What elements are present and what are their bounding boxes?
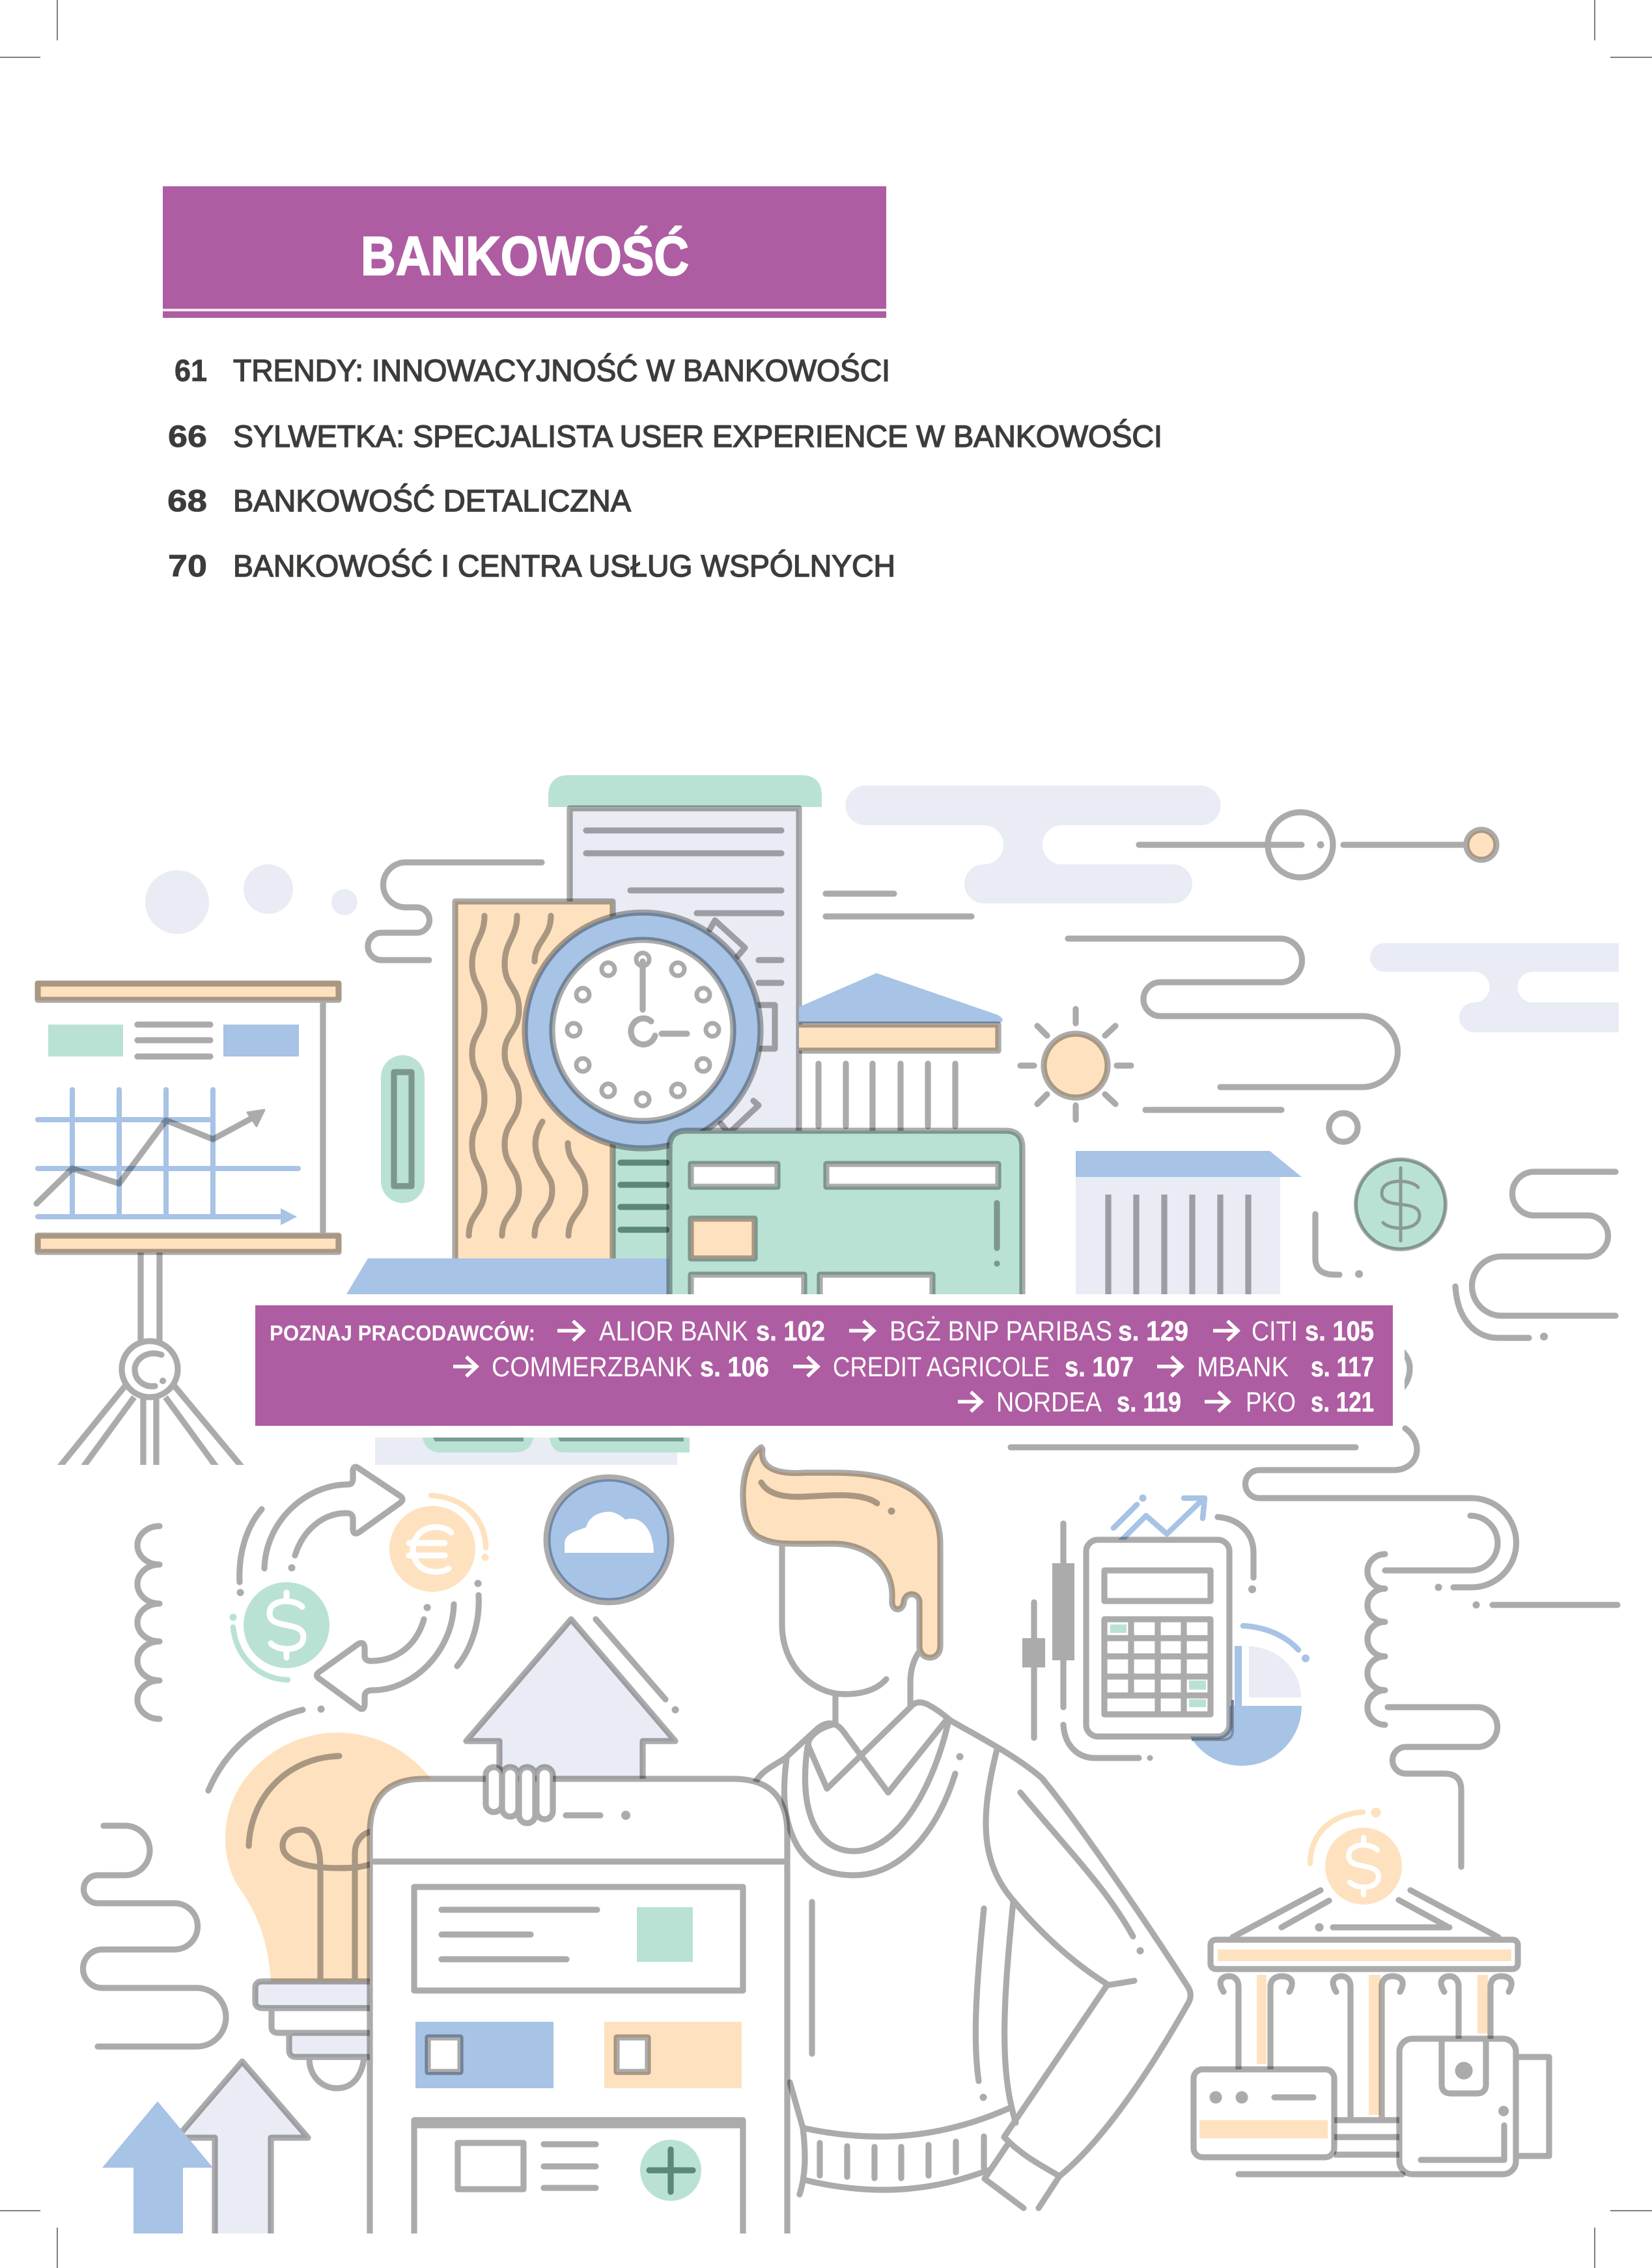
icon: currency exchange arrows xyxy=(233,1467,486,1709)
icon: green dollar coin xyxy=(1355,1159,1446,1250)
employers row 3: PKO xyxy=(1246,1387,1296,1418)
employers row 2: s. 107 xyxy=(1065,1352,1134,1383)
entry 70: 70 xyxy=(168,548,207,583)
table of contents xyxy=(167,353,1162,583)
illustration: coil left xyxy=(137,1526,160,1719)
chart: candlesticks and arcs xyxy=(1022,1517,1253,1758)
illustration: tower xyxy=(548,775,822,1264)
employers row 3 xyxy=(996,1387,1374,1418)
illustration: temple behind card xyxy=(799,973,1003,1131)
employers row 1: s. 102 xyxy=(756,1316,825,1347)
illustration: man with sweater xyxy=(743,1447,1190,2208)
employers row 1: s. 129 xyxy=(1118,1316,1188,1347)
panel: title banner xyxy=(163,186,886,318)
icon: up arrow house xyxy=(466,1619,675,1779)
icon: light bulb xyxy=(225,1733,431,2088)
employers row 3: s. 121 xyxy=(1311,1387,1374,1418)
chart: pie behind calculator xyxy=(1182,1626,1306,1766)
illustration: decorative squiggles lower right xyxy=(1011,1428,1617,1867)
entry 61: 61 xyxy=(175,353,207,388)
employers row 3: NORDEA xyxy=(996,1387,1102,1418)
icon: growth arrow xyxy=(1113,1498,1205,1542)
chart: presentation board xyxy=(35,981,341,1253)
icon: white dollar sign on bank coin xyxy=(1349,1837,1379,1895)
illustration: decorative squiggles upper xyxy=(368,862,1616,1391)
employers row 1 xyxy=(599,1316,1374,1347)
entry 61: TRENDY: INNOWACYJNOŚĆ W BANKOWOŚCI xyxy=(233,353,890,388)
icon: dollar sign xyxy=(1382,1168,1420,1241)
employers row 2: MBANK xyxy=(1197,1352,1289,1383)
icon: euro sign xyxy=(409,1527,451,1572)
icon: white dollar sign xyxy=(270,1593,303,1658)
icon: green pill xyxy=(381,1055,425,1203)
icon: sun xyxy=(1020,1009,1131,1120)
icon: cloud circle xyxy=(546,1477,671,1602)
employers row 1: ALIOR BANK xyxy=(599,1316,748,1347)
heading: poznaj pracodawców: POZNAJ PRACODAWCÓW: xyxy=(270,1321,535,1345)
illustration: squiggle left xyxy=(83,1826,226,2047)
illustration: phone xyxy=(370,1779,787,2233)
entry 68: BANKOWOŚĆ DETALICZNA xyxy=(233,483,632,518)
illustration: green card xyxy=(669,1131,1022,1294)
employers row 1: BGŻ BNP PARIBAS xyxy=(889,1316,1112,1347)
panel: bottom page mask xyxy=(0,2233,1652,2268)
illustration: peach building with waves xyxy=(346,901,677,1294)
icon: up arrows xyxy=(102,2062,308,2233)
entry 66: SYLWETKA: SPECJALISTA USER EXPERIENCE W BANKOWOŚCI xyxy=(233,419,1162,453)
illustration: arc above bulb xyxy=(208,1709,321,1791)
employers row 2: CREDIT AGRICOLE xyxy=(833,1352,1050,1383)
icon: hand fingers on phone xyxy=(486,1767,553,1823)
employers row 1: s. 105 xyxy=(1305,1316,1374,1347)
employers row 3: s. 119 xyxy=(1117,1387,1181,1418)
employers row 2 xyxy=(492,1352,1374,1383)
panel: white mask around employer band xyxy=(244,1294,1405,1438)
icon: bank with coin xyxy=(1194,1812,1549,2174)
employers row 1: CITI xyxy=(1252,1316,1298,1347)
illustration: strip under band xyxy=(375,1438,690,1465)
illustration: top line with circle and dot xyxy=(1139,812,1496,877)
title: BANKOWOŚĆ xyxy=(361,225,689,287)
entry 68: 68 xyxy=(167,483,207,518)
employers row 2: s. 106 xyxy=(700,1352,769,1383)
icon: clock xyxy=(525,913,775,1148)
entry 70: BANKOWOŚĆ I CENTRA USŁUG WSPÓLNYCH xyxy=(233,548,895,583)
panel: employer band xyxy=(255,1305,1393,1426)
illustration: clouds and dots xyxy=(145,786,1619,1032)
icon: calculator xyxy=(1086,1540,1233,1740)
illustration: presentation stand xyxy=(55,1253,246,1472)
arrows xyxy=(453,1321,1238,1411)
employers row 2: COMMERZBANK xyxy=(492,1352,692,1383)
entry 66: 66 xyxy=(168,419,207,453)
illustration: lower building xyxy=(1076,1151,1302,1294)
employers row 2: s. 117 xyxy=(1311,1352,1374,1383)
